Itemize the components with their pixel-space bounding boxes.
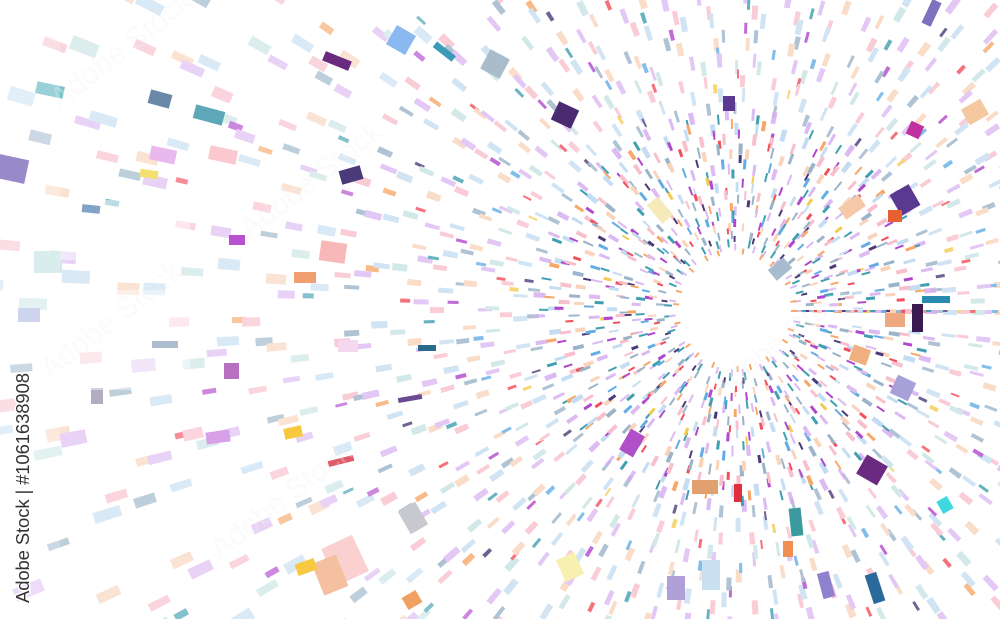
vertical stock id label: Adobe Stock | #1061638908 [12,373,33,603]
watermark text: Adobe Stock [704,274,859,406]
watermark text [34,0,859,566]
centre white hole [684,264,788,356]
middle ring of medium marks [334,0,1000,619]
inner dense ring of coloured ticks [533,108,937,512]
watermark text: Adobe Stock [34,254,189,386]
left clearing fades marks on the far left [0,0,190,619]
watermark text: Adobe Stock [204,434,359,566]
watermark text: Adobe Stock [234,114,389,246]
